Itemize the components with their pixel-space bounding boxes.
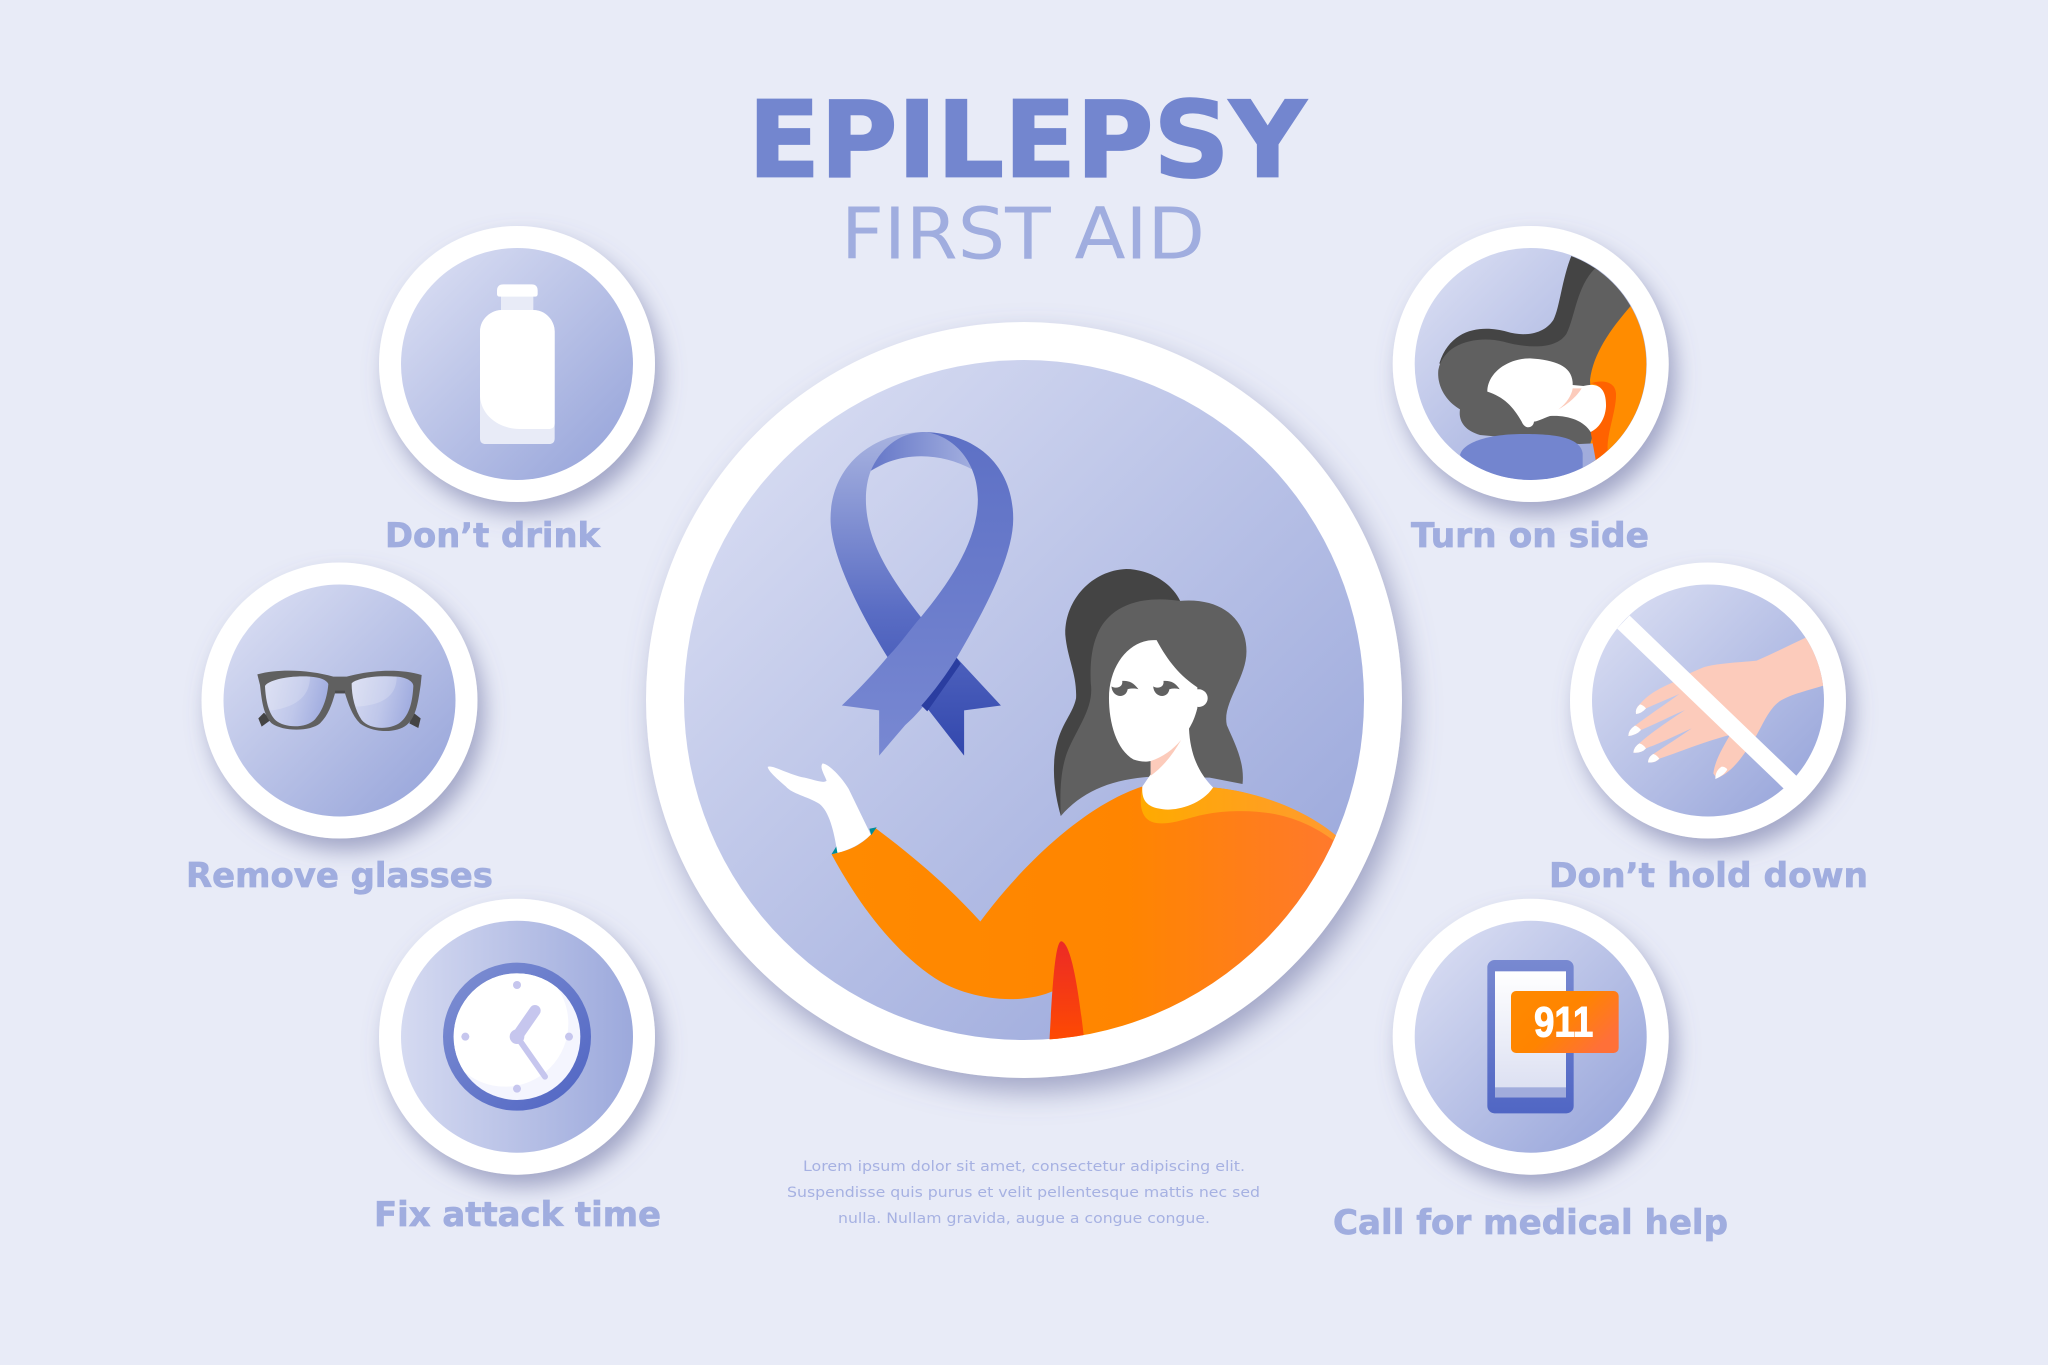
body text: Suspendisse quis purus et velit pellentesque mattis nec sed bbox=[787, 1185, 1260, 1201]
icon: hand with prohibition bar bbox=[1623, 622, 1825, 785]
body text bbox=[787, 1159, 1260, 1227]
awareness ribbon bbox=[831, 432, 1013, 756]
central white ring bbox=[646, 322, 1402, 1078]
cuff bbox=[832, 827, 877, 854]
icon: clock bbox=[442, 960, 591, 1111]
disc bbox=[224, 584, 456, 816]
disc bbox=[401, 921, 633, 1153]
title: EPILEPSY: EPILEPSY bbox=[748, 80, 1308, 202]
eye right bbox=[1153, 681, 1180, 696]
panel: call for medical help bbox=[1333, 899, 1728, 1243]
disc bbox=[1415, 921, 1647, 1153]
eye left bbox=[1111, 681, 1138, 696]
neck shadow bbox=[1151, 740, 1181, 776]
ring bbox=[379, 899, 655, 1175]
disc bbox=[1592, 584, 1824, 816]
ring bbox=[1393, 226, 1669, 502]
icon: person on side bbox=[1438, 253, 1647, 483]
central gradient disc bbox=[684, 360, 1364, 1040]
sweater yoke bbox=[1141, 787, 1337, 842]
disc bbox=[1415, 248, 1647, 480]
ear bbox=[1197, 689, 1208, 707]
sweater bbox=[832, 787, 1367, 1047]
ring bbox=[202, 562, 478, 838]
ring bbox=[1393, 899, 1669, 1175]
label: Don’t hold down bbox=[1549, 856, 1868, 896]
hand bbox=[768, 763, 871, 853]
body text: Lorem ipsum dolor sit amet, consectetur adipiscing elit. bbox=[803, 1159, 1245, 1175]
icon: phone with 911 badge bbox=[1487, 960, 1619, 1113]
label: Call for medical help bbox=[1333, 1203, 1728, 1243]
hair front bbox=[1060, 599, 1246, 816]
hair back bbox=[1054, 569, 1180, 816]
panel: turn on side bbox=[1393, 226, 1669, 556]
panel: remove glasses bbox=[186, 562, 493, 896]
disc bbox=[401, 248, 633, 480]
label: Turn on side bbox=[1411, 516, 1649, 556]
ring bbox=[379, 226, 655, 502]
woman figure bbox=[768, 569, 1367, 1047]
icon: glasses bbox=[257, 671, 422, 731]
face and neck bbox=[1109, 640, 1213, 810]
subtitle: FIRST AID: FIRST AID bbox=[841, 192, 1205, 276]
icon: bottle bbox=[480, 284, 555, 444]
ring bbox=[1570, 562, 1846, 838]
panel: central illustration bbox=[646, 322, 1402, 1078]
body text: nulla. Nullam gravida, augue a congue congue. bbox=[838, 1211, 1210, 1227]
label: Remove glasses bbox=[186, 856, 493, 896]
sleeve fold bbox=[1049, 941, 1084, 1047]
illustration group bbox=[768, 432, 1367, 1047]
icon: phone with 911 badge: 911 bbox=[1534, 999, 1593, 1047]
label: Don’t drink bbox=[385, 516, 601, 556]
panel: don't drink bbox=[379, 226, 655, 556]
panel: fix attack time bbox=[374, 899, 661, 1235]
panel: don't hold down bbox=[1549, 562, 1868, 896]
infographic canvas bbox=[188, 97, 1866, 1242]
label: Fix attack time bbox=[374, 1195, 661, 1235]
